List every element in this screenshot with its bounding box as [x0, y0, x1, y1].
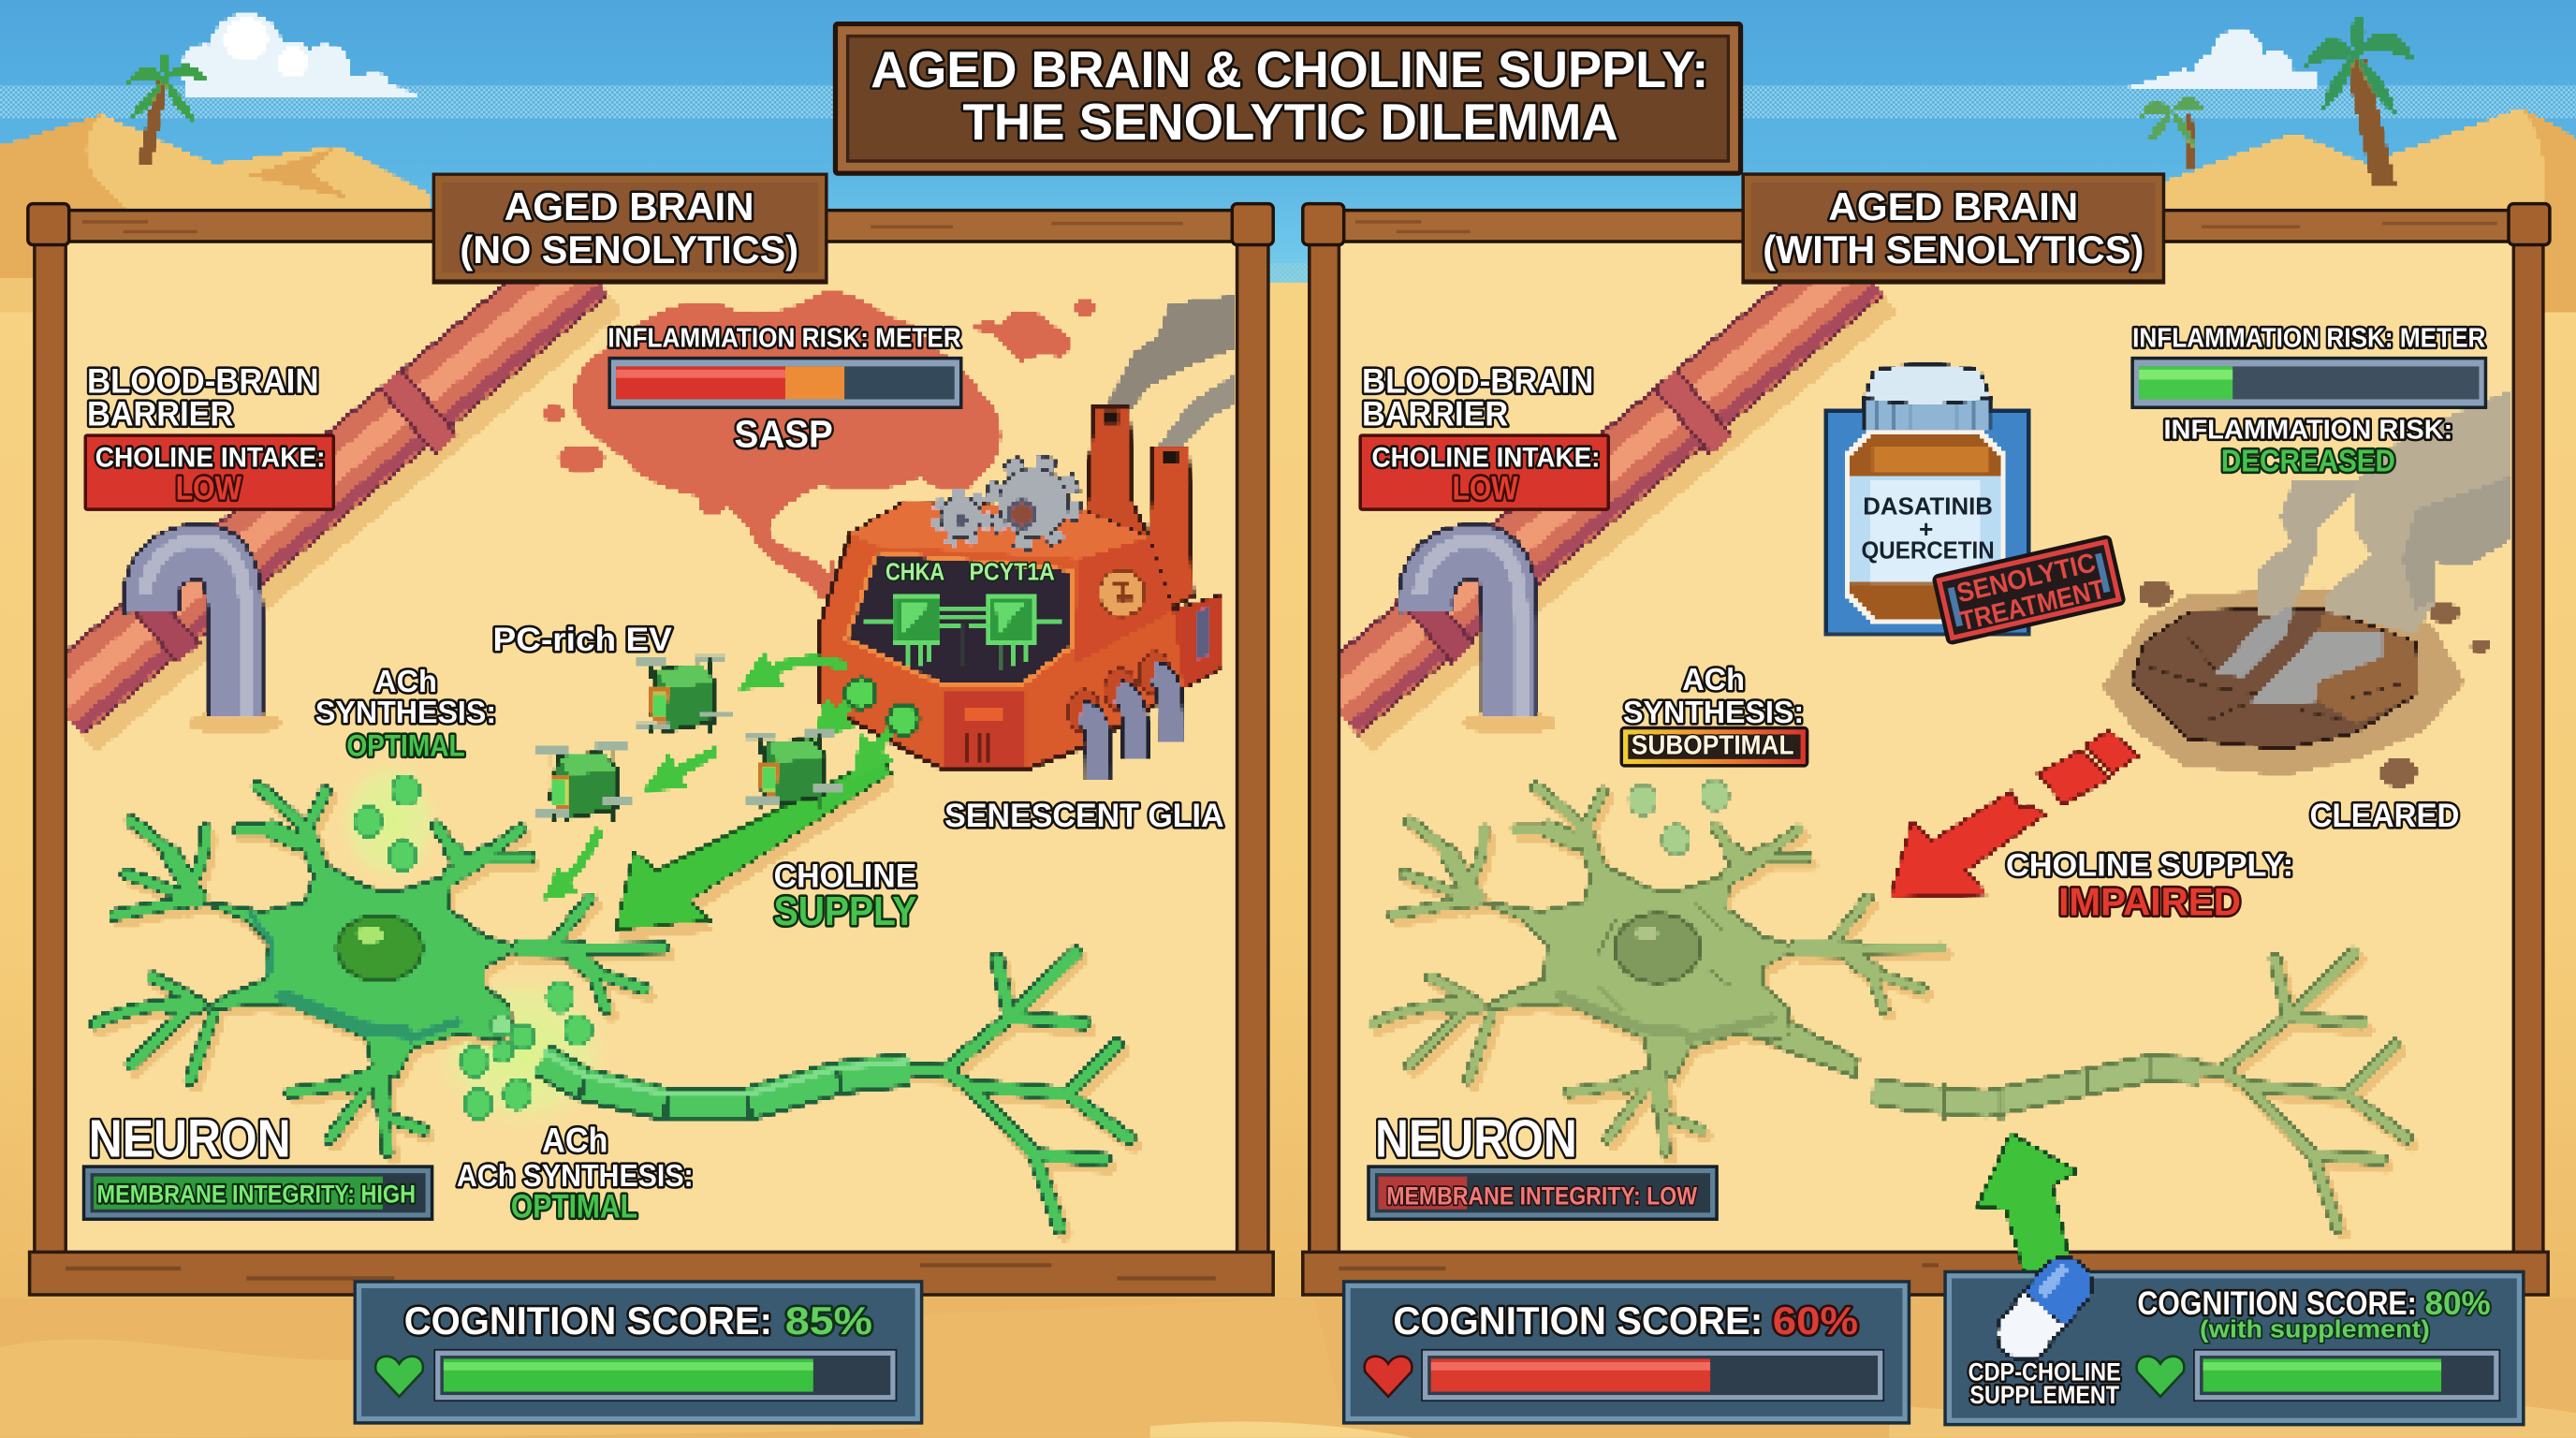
enzyme labels: CHKA: [886, 560, 944, 586]
label: senescent glia: SENESCENT GLIA: [944, 798, 1224, 834]
arrow: supplement green up: [1978, 1134, 2076, 1282]
icon: CDP-choline capsule: [1987, 1248, 2101, 1371]
icon: senolytic bottle: [1827, 365, 2027, 633]
icon: senolytic bottle: +: [1919, 515, 1933, 543]
panel: aged brain with senolytics: [1303, 172, 2550, 1295]
inflammation meter: INFLAMMATION RISK: METER: [2132, 323, 2486, 353]
label: choline supply: SUPPLY: [774, 888, 916, 934]
label: ACh synthesis lower: ACh SYNTHESIS:: [457, 1159, 694, 1194]
label: ACh synthesis upper: SYNTHESIS:: [315, 696, 496, 730]
label: ACh synthesis suboptimal: SYNTHESIS:: [1623, 696, 1804, 730]
label: choline supply impaired: CHOLINE SUPPLY:: [2006, 847, 2293, 883]
blood-brain barrier pipe: [56, 263, 603, 728]
senescent glia factory: [818, 406, 1221, 781]
label: blood-brain barrier: BLOOD-BRAIN: [87, 361, 318, 400]
label: ACh synthesis upper: ACh: [374, 665, 437, 699]
myelin axon: [542, 1060, 909, 1104]
label: ACh synthesis upper: OPTIMAL: [346, 728, 465, 762]
label: ACh synthesis upper: [315, 665, 496, 762]
inflammation meter: [607, 323, 962, 455]
label: cleared: CLEARED: [2310, 798, 2459, 834]
stamp: senolytic treatment: TREATMENT: [1957, 575, 2108, 637]
label: blood-brain barrier: [87, 361, 318, 433]
score panel: cognition 60%: COGNITION SCORE:: [1393, 1299, 1763, 1343]
callout: choline intake low: [84, 433, 335, 511]
label: ACh synthesis suboptimal: SUBOPTIMAL: [1632, 731, 1794, 761]
label: ACh synthesis lower: [457, 1121, 694, 1225]
stamp: senolytic treatment: SENOLYTIC: [1954, 548, 2099, 609]
label: ACh synthesis suboptimal: [1620, 663, 1808, 768]
panel interior: [1339, 240, 2513, 1252]
ACh vesicle dots: [355, 775, 592, 1119]
label: blood-brain barrier: [1362, 361, 1593, 433]
label: ACh synthesis lower: ACh: [542, 1121, 607, 1159]
label: choline supply: CHOLINE: [774, 858, 916, 895]
label: neuron: NEURON: [1375, 1109, 1577, 1168]
ACh vesicles glow: [333, 753, 618, 1137]
stamp: senolytic treatment: [1931, 534, 2127, 646]
label: PC-rich EV: PC-rich EV: [493, 622, 672, 658]
arrow: large choline supply: [616, 757, 896, 940]
drones: PC-rich EV: [537, 659, 842, 822]
green nodes: [846, 679, 918, 735]
grey u-pipe: [144, 540, 281, 735]
membrane integrity bar: [1367, 1165, 1719, 1221]
callout: choline intake low: [1358, 433, 1610, 511]
score panel: cognition 60%: 60%: [1773, 1299, 1858, 1343]
score panel: cognition 80% with supplement: 80%: [2425, 1285, 2491, 1322]
inflammation meter: SASP: [735, 412, 833, 455]
score panel: cognition 80% with supplement: [1943, 1270, 2525, 1426]
blood-brain barrier pipe: [1331, 263, 1878, 728]
membrane integrity bar: MEMBRANE INTEGRITY: LOW: [1386, 1181, 1697, 1210]
enzyme labels: [886, 560, 1055, 586]
fragmented axon: [1873, 1068, 2200, 1104]
icon: left palm tree: [124, 52, 207, 165]
score panel: cognition 85%: [353, 1280, 923, 1425]
panel heading sign: AGED BRAIN: [505, 184, 754, 228]
panel heading sign: [1741, 172, 2165, 285]
label: blood-brain barrier: BLOOD-BRAIN: [1362, 361, 1593, 400]
title sign: [833, 22, 1743, 176]
inflammation meter: DECREASED: [2221, 445, 2395, 479]
crater: cleared glia: [2103, 580, 2491, 787]
exhaust pipes: [1068, 653, 1171, 781]
inflammation meter: INFLAMMATION RISK: METER: [607, 323, 961, 353]
label: ACh synthesis lower: OPTIMAL: [511, 1189, 637, 1225]
panel: aged brain no senolytics: [28, 172, 1273, 1295]
icon: senolytic bottle: QUERCETIN: [1862, 536, 1995, 565]
title sign: THE SENOLYTIC DILEMMA: [962, 94, 1618, 151]
score panel: cognition 80% with supplement: (with supplement): [2200, 1315, 2430, 1343]
enzyme labels: PCYT1A: [970, 560, 1055, 586]
smoke cloud: [2217, 391, 2509, 705]
arrow: broken red supply: [1891, 731, 2137, 897]
wooden frame: [28, 204, 1273, 1295]
smoke from stacks: [1104, 296, 1236, 450]
panel interior: [66, 240, 1237, 1252]
label: blood-brain barrier: BARRIER: [87, 395, 233, 433]
callout: choline intake low: LOW: [1453, 471, 1518, 507]
callout: choline intake low: LOW: [176, 471, 242, 507]
membrane integrity bar: MEMBRANE INTEGRITY: HIGH: [97, 1180, 416, 1209]
callout: choline intake low: CHOLINE INTAKE:: [1372, 442, 1600, 473]
label: choline supply: [774, 858, 916, 934]
SASP cloud: [544, 289, 1094, 600]
score panel: cognition 80% with supplement: SUPPLEMENT: [1969, 1380, 2119, 1409]
gears: [936, 462, 1075, 544]
label: ACh synthesis suboptimal: ACh: [1682, 663, 1745, 697]
inflammation meter: INFLAMMATION RISK:: [2163, 416, 2452, 446]
wooden frame: [1303, 204, 2550, 1295]
icon: senolytic bottle: DASATINIB: [1863, 492, 1993, 520]
callout: choline intake low: CHOLINE INTAKE:: [95, 442, 326, 473]
title sign: AGED BRAIN & CHOLINE SUPPLY:: [871, 41, 1708, 98]
arrows: EV release: [559, 660, 897, 888]
score panel: cognition 85%: 85%: [785, 1299, 872, 1343]
panel heading sign: (NO SENOLYTICS): [460, 227, 798, 271]
label: neuron: NEURON: [89, 1109, 291, 1168]
label: choline supply impaired: [2006, 847, 2293, 924]
label: choline supply impaired: IMPAIRED: [2058, 880, 2241, 924]
neuron: healthy: [95, 787, 1134, 1234]
inflammation meter: [2130, 323, 2487, 479]
icon: right palm trees: [2139, 17, 2415, 184]
neuron: damaged: [1373, 787, 2411, 1234]
membrane integrity bar: [82, 1165, 433, 1221]
score panel: cognition 85%: COGNITION SCORE:: [404, 1299, 772, 1343]
icon: left cloud: [181, 13, 419, 98]
label: blood-brain barrier: BARRIER: [1362, 395, 1508, 433]
score panel: cognition 80% with supplement: CDP-CHOLINE: [1969, 1357, 2121, 1386]
faded ACh vesicles: [1630, 781, 1728, 855]
score panel: cognition 80% with supplement: COGNITION SCORE:: [2137, 1285, 2417, 1322]
panel heading sign: AGED BRAIN: [1828, 184, 2078, 228]
circuit chips: [894, 596, 940, 642]
score panel: cognition 60%: [1342, 1280, 1910, 1425]
icon: right cloud: [2130, 30, 2317, 87]
grey u-pipe: [1419, 540, 1556, 735]
panel heading sign: [432, 172, 828, 285]
panel heading sign: (WITH SENOLYTICS): [1763, 227, 2144, 271]
